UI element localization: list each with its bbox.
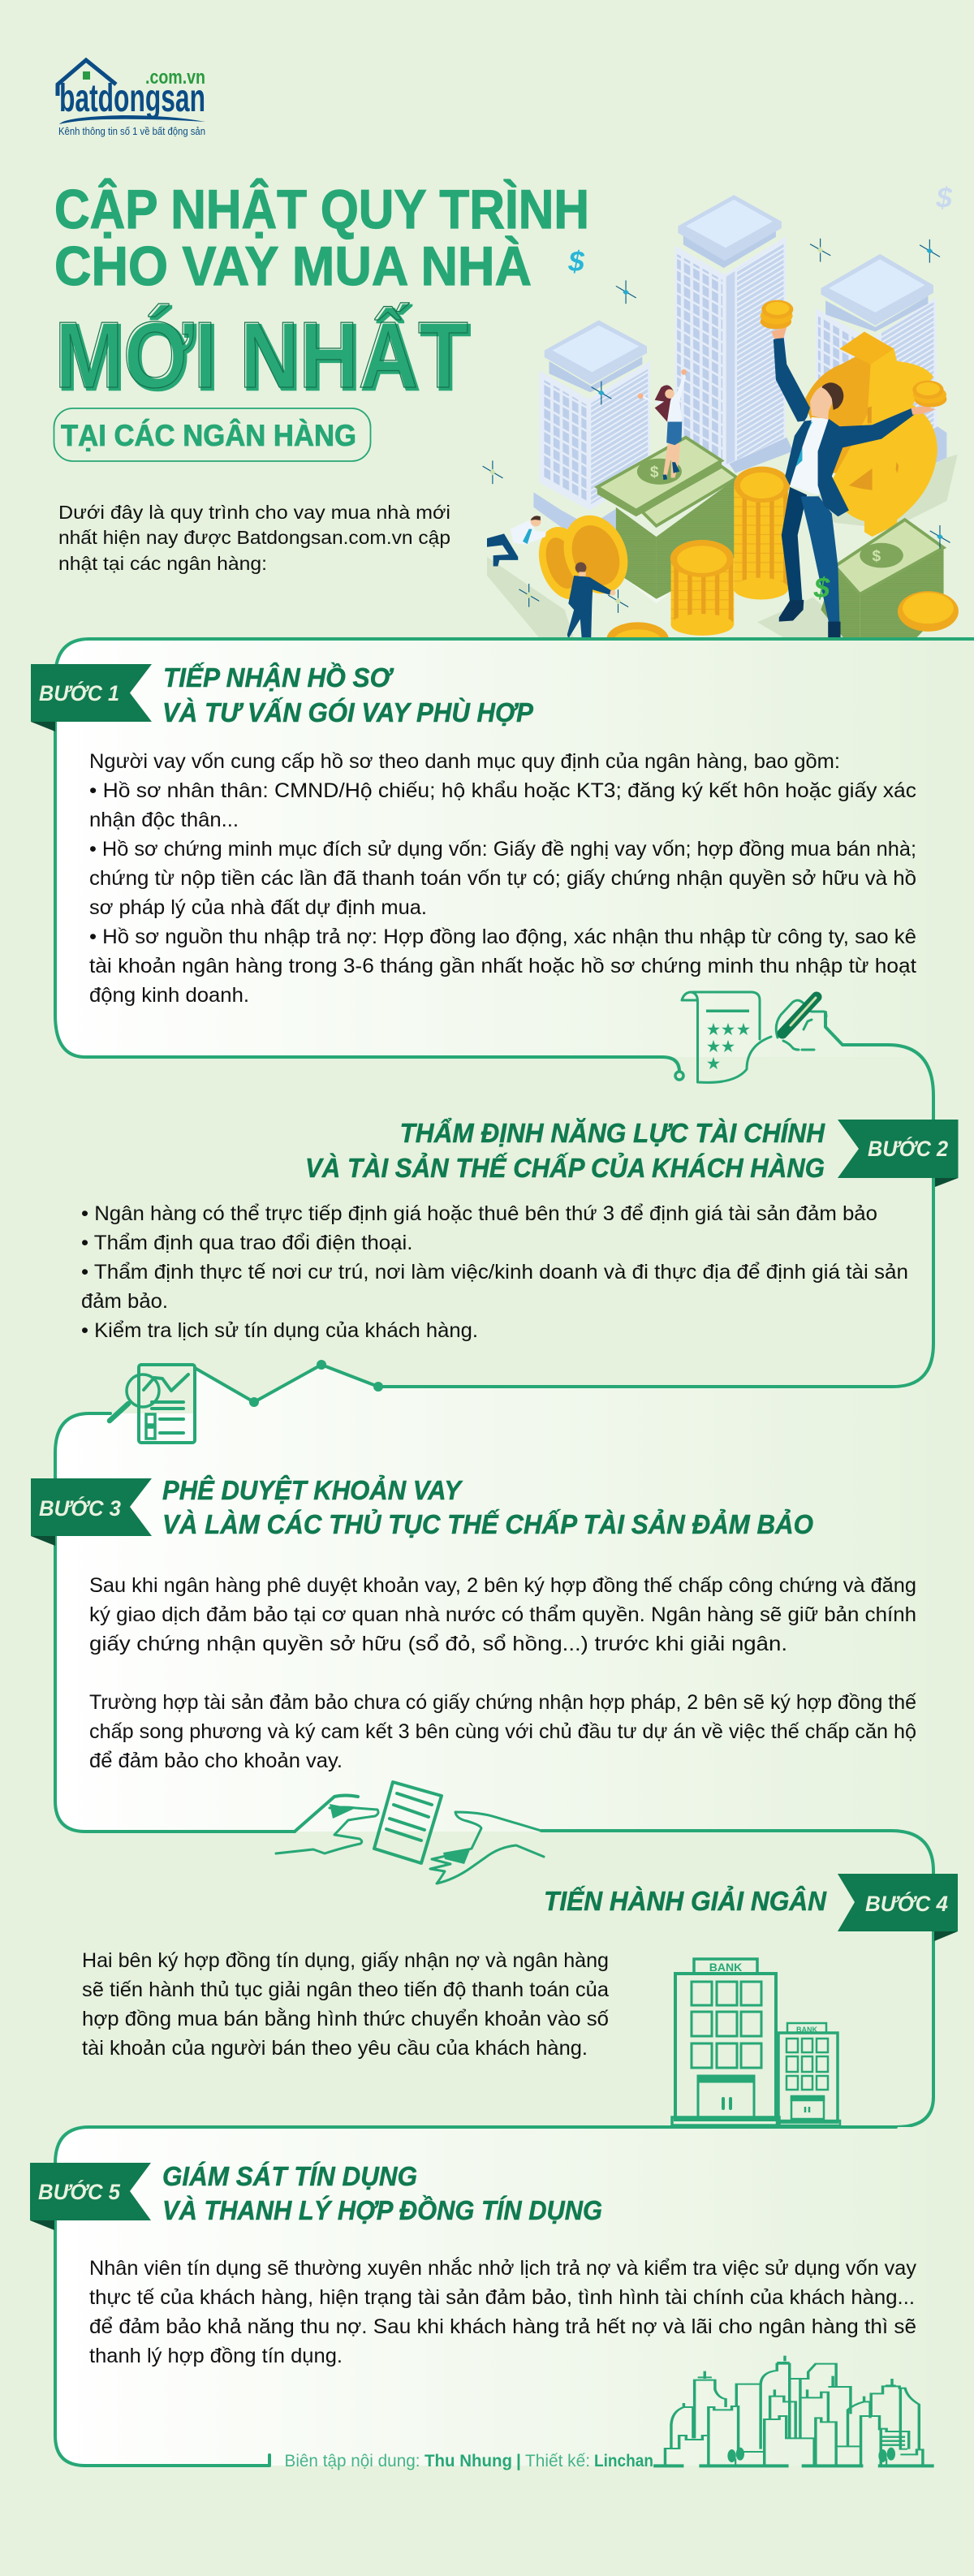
trees [727, 2448, 895, 2466]
icon: document with stars: ★ [721, 1022, 735, 1038]
logo: batdongsan.com.vn: batdongsan [59, 77, 205, 120]
step 1 body text: • Hồ sơ nhân thân: CMND/Hộ chiếu; hộ khẩu hoặc KT3; đăng ký kết hôn hoặc giấy xác [89, 779, 916, 802]
step 3 body text: chấp song phương và ký cam kết 3 bên cùng với chủ đầu tư dự án về việc thế chấp căn hộ [89, 1720, 916, 1743]
step 2 body text: • Thẩm định qua trao đổi điện thoại. [81, 1232, 412, 1254]
step 1 body text: Người vay vốn cung cấp hồ sơ theo danh mục quy định của ngân hàng, bao gồm: [89, 750, 840, 773]
icons: dollar signs [567, 182, 952, 604]
panel: step 3 [31, 1360, 974, 1883]
step 3 heading: VÀ LÀM CÁC THỦ TỤC THẾ CHẤP TÀI SẢN ĐẢM BẢO [162, 1509, 813, 1540]
footer credits: Linchan [594, 2452, 653, 2470]
icon: report with magnifier [110, 1365, 195, 1443]
icon: document with stars [682, 992, 771, 1082]
title: CẬP NHẬT QUY TRÌNH [54, 178, 589, 240]
money stack: right: $ [873, 548, 881, 565]
coins: held left [761, 300, 793, 330]
icon: end dot [675, 1072, 683, 1080]
icon: bank large: BANK [709, 1961, 742, 1974]
coin: bottom centre [606, 622, 669, 656]
icon: bank large [672, 1959, 779, 2125]
step 1 body text: chứng từ nộp tiền các lần đã thanh toán vốn tự có; giấy chứng nhận quyền sở hữu và hồ [89, 867, 916, 890]
step 2 body text: • Ngân hàng có thể trực tiếp định giá hoặc thuê bên thứ 3 để định giá tài sản đảm bảo [81, 1202, 877, 1225]
icons: sparkles [483, 239, 950, 613]
step 3 body text: Sau khi ngân hàng phê duyệt khoản vay, 2 bên ký hợp đồng thế chấp công chứng và đăng [89, 1574, 916, 1597]
step 2 heading: VÀ TÀI SẢN THẾ CHẤP CỦA KHÁCH HÀNG [305, 1153, 825, 1184]
title: CHO VAY MUA NHÀ [54, 235, 532, 297]
step 2 heading: THẨM ĐỊNH NĂNG LỰC TÀI CHÍNH [399, 1118, 825, 1149]
building: right tower [816, 254, 946, 492]
title: MỚI NHẤT [54, 301, 468, 408]
footer credits: Thu Nhung [425, 2452, 512, 2470]
step 5 body text: thực tế của khách hàng, hiện trạng tài sản đảm bảo, tình hình tài chính của khách hàng... [89, 2286, 915, 2309]
step 4 body text: tài khoản của người bán theo yêu cầu của khách hàng. [82, 2037, 588, 2060]
footer credits: Thiết kế: [525, 2452, 590, 2470]
step 5 badge: BƯỚC 5 [38, 2179, 121, 2204]
step 3 body text: ký giao dịch đảm bảo tại cơ quan nhà nước có thẩm quyền. Ngân hàng sẽ giữ bản chính [89, 1603, 916, 1626]
coins: lower left big pair [530, 506, 639, 606]
step 1 body text: động kinh doanh. [89, 984, 249, 1007]
step 5 body text [89, 2256, 916, 2367]
step 5 heading [162, 2161, 602, 2226]
building: left tower [533, 320, 650, 535]
step 1 badge [31, 664, 152, 731]
step 2 badge [838, 1120, 958, 1187]
panel: step 4 [82, 1831, 958, 2127]
step 3 body text: Trường hợp tài sản đảm bảo chưa có giấy chứng nhận hợp pháp, 2 bên sẽ ký hợp đồng thế [89, 1691, 916, 1714]
building: centre tower [675, 195, 793, 473]
footer credits: | [516, 2452, 521, 2470]
step 2 body text: • Kiểm tra lịch sử tín dụng của khách hàng. [81, 1319, 478, 1342]
intro text: nhất hiện nay được Batdongsan.com.vn cập [58, 527, 450, 548]
subtitle pill: TẠI CÁC NGÂN HÀNG [61, 418, 356, 452]
intro text: Dưới đây là quy trình cho vay mua nhà mới [58, 502, 450, 523]
step 1 heading [162, 662, 534, 728]
step 1 badge: BƯỚC 1 [39, 680, 119, 705]
panel: step 1 [31, 639, 974, 1080]
step 5 badge [30, 2163, 151, 2230]
step 3 body text: để đảm bảo cho khoản vay. [89, 1750, 343, 1772]
step 5 heading: GIÁM SÁT TÍN DỤNG [162, 2161, 417, 2192]
illustration: city, money and businessman [483, 182, 959, 656]
step 5 body text: để đảm bảo khả năng thu nợ. Sau khi khách hàng trả hết nợ và lãi cho ngân hàng thì sẽ [89, 2315, 916, 2338]
money stack: centre: $ [650, 464, 659, 481]
icon: hands exchanging document [276, 1782, 544, 1883]
icon: large gold dollar [804, 332, 937, 537]
step 4 body text [82, 1949, 609, 2060]
logo: batdongsan.com.vn [58, 60, 205, 137]
step 3 heading: PHÊ DUYỆT KHOẢN VAY [162, 1475, 463, 1506]
step 4 heading: TIẾN HÀNH GIẢI NGÂN [544, 1886, 827, 1917]
step 3 heading [162, 1475, 813, 1540]
icon: bank small: BANK [796, 2026, 817, 2034]
logo: batdongsan.com.vn: Kênh thông tin số 1 về bất động sản [58, 126, 205, 137]
step 5 body text: thanh lý hợp đồng tín dụng. [89, 2345, 343, 2367]
icon: hand with pen [776, 997, 826, 1050]
step 1 body text [89, 750, 916, 1007]
step 4 badge [838, 1874, 958, 1941]
footer credits: Biên tập nội dung: [284, 2452, 420, 2470]
step 4 badge: BƯỚC 4 [865, 1891, 948, 1916]
icons: dollar signs: $ [567, 246, 584, 278]
figure: woman on money [638, 369, 687, 480]
step 3 badge: BƯỚC 3 [39, 1495, 121, 1521]
coin stack: front [670, 540, 734, 636]
title: MỚI NHẤT [57, 304, 471, 410]
money stack: right [821, 520, 944, 639]
ground shadows [487, 455, 958, 639]
figure: businessman [771, 327, 936, 639]
step 4 body text: Hai bên ký hợp đồng tín dụng, giấy nhận nợ và ngân hàng [82, 1949, 609, 1972]
icon: document with stars: ★ [706, 1039, 721, 1055]
icons: dollar signs: $ [813, 572, 830, 604]
step 2 heading [305, 1118, 825, 1184]
step 2 body text: đảm bảo. [81, 1290, 168, 1313]
step 3 body text [89, 1574, 916, 1772]
icon: city skyline [653, 2356, 934, 2466]
intro text: nhật tại các ngân hàng: [58, 553, 267, 574]
subtitle pill [54, 408, 370, 461]
step 1 body text: tài khoản ngân hàng trong 3-6 tháng gần nhất hoặc hồ sơ chứng minh thu nhập từ hoạt [89, 955, 916, 977]
step 2 badge: BƯỚC 2 [868, 1136, 948, 1161]
step 4 body text: sẽ tiến hành thủ tục giải ngân theo tiến độ thanh toán của [82, 1978, 609, 2001]
icons: dollar signs: $ [935, 182, 952, 214]
step 5 heading: VÀ THANH LÝ HỢP ĐỒNG TÍN DỤNG [162, 2195, 602, 2226]
coin stack: tall [734, 467, 790, 599]
step 1 heading: VÀ TƯ VẤN GÓI VAY PHÙ HỢP [162, 697, 534, 728]
title [54, 178, 589, 410]
money stack: centre [597, 438, 737, 603]
figure: man pushing coin [487, 516, 546, 567]
logo: batdongsan.com.vn: .com.vn [145, 67, 205, 88]
step 1 body text: • Hồ sơ nguồn thu nhập trả nợ: Hợp đồng lao động, xác nhận thu nhập từ công ty, sao kê [89, 926, 916, 948]
step 1 heading: TIẾP NHẬN HỒ SƠ [163, 662, 394, 693]
icon: bank small [777, 2023, 840, 2125]
icon: document with stars: ★ [721, 1039, 735, 1055]
icon: document with stars: ★ [706, 1022, 721, 1038]
step 1 body text: sơ pháp lý của nhà đất dự định mua. [89, 896, 427, 919]
step 2 body text [81, 1202, 908, 1342]
step 3 badge [31, 1478, 152, 1546]
panel: step 5 [30, 2127, 974, 2470]
coins: held right [912, 381, 946, 408]
coin: bottom right [898, 591, 959, 632]
figure: man carrying coin [567, 563, 615, 639]
step 4 body text: hợp đồng mua bán bằng hình thức chuyển khoản vào số [82, 2007, 609, 2030]
step 3 body text: giấy chứng nhận quyền sở hữu (sổ đỏ, sổ hồng...) trước khi giải ngân. [89, 1633, 787, 1655]
icon: document with stars: ★ [737, 1022, 750, 1038]
panel: step 2 [81, 992, 958, 1387]
chart dots [249, 1360, 383, 1407]
footer credits [284, 2452, 653, 2470]
icon: house roof [58, 60, 116, 96]
step 1 body text: • Hồ sơ chứng minh mục đích sử dụng vốn: Giấy đề nghị vay vốn; hợp đồng mua bán nhà; [89, 838, 916, 861]
step 2 body text: • Thẩm định thực tế nơi cư trú, nơi làm việc/kinh doanh và đi thực địa để định giá tài sản [81, 1261, 908, 1284]
intro text [58, 502, 450, 574]
step 1 body text: nhận độc thân... [89, 809, 239, 831]
icon: document with stars: ★ [706, 1056, 721, 1072]
step 5 body text: Nhân viên tín dụng sẽ thường xuyên nhắc nhở lịch trả nợ và kiểm tra việc sử dụng vốn vay [89, 2256, 916, 2280]
